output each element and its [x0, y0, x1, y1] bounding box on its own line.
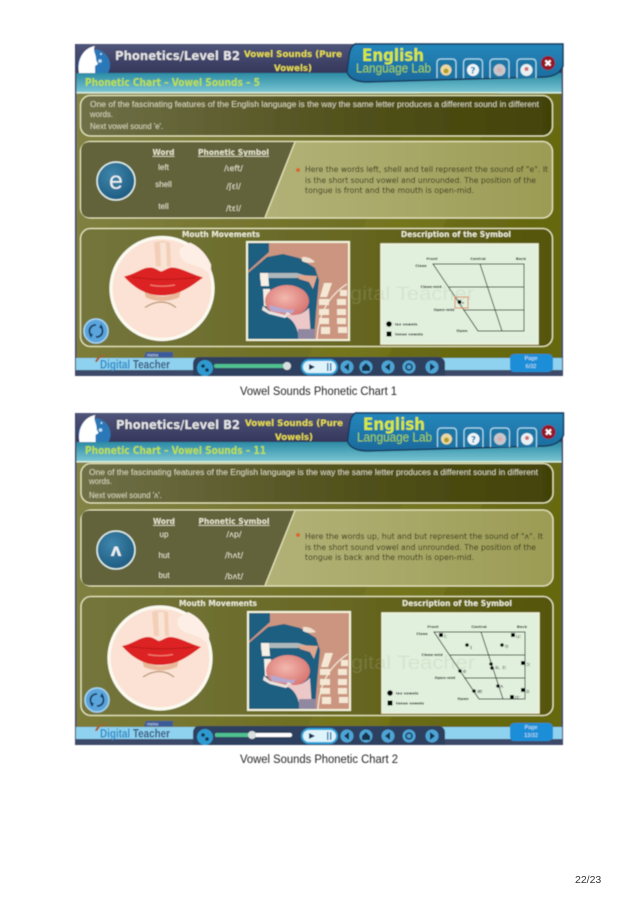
panel: introduction: One of the fascinating features of the English language is the way the same letter produces a different sound in different	[90, 100, 540, 109]
icon: vowel caret badge: ʌ	[110, 541, 122, 561]
chart: vowel trapezium: Close	[415, 263, 427, 268]
chart: vowel trapezium with all symbols: lax vowels	[396, 690, 419, 696]
page counter: 6/32	[526, 364, 536, 370]
caption 2: Vowel Sounds Phonetic Chart 2	[240, 752, 398, 766]
text: explanation: is the short sound vowel and unrounded. The position of the	[305, 542, 536, 552]
page number: 22/23	[575, 874, 601, 886]
chart: vowel trapezium with all symbols: ʊ	[505, 644, 509, 650]
panel: introduction: Next vowel sound 'e'.	[90, 122, 163, 131]
caption 1: Vowel Sounds Phonetic Chart 1	[240, 384, 397, 398]
panel: introduction: words.	[89, 110, 113, 119]
icon: replay	[84, 319, 108, 343]
footer: control bar	[75, 352, 563, 376]
logo text: English Language Lab: English	[363, 415, 425, 435]
chart: vowel trapezium: Close-mid	[420, 284, 442, 289]
chart: vowel trapezium: Open-mid	[434, 307, 455, 312]
panel: introduction: words.	[88, 477, 112, 486]
footer brand: Digital Teacher	[100, 360, 170, 372]
panel: introduction	[80, 96, 552, 136]
panel: introduction	[81, 464, 553, 503]
table: words: /ʌp/	[226, 530, 242, 539]
table: words: /ʃɛl/	[226, 182, 241, 191]
watermark: gital Teacher	[350, 284, 475, 305]
heading: topic: Vowels)	[274, 64, 312, 74]
table: words: but	[158, 571, 170, 580]
chart: vowel trapezium with all symbols: ɒ	[526, 689, 530, 695]
chart: vowel trapezium with all symbols: Close-mid	[421, 652, 443, 657]
progress slider	[215, 731, 292, 739]
icon: head logo and Language Lab toolbar	[78, 44, 563, 82]
text: explanation: Here the words up, hut and but represent the sound of "ʌ". It	[305, 531, 544, 541]
heading: topic	[244, 50, 342, 74]
page counter	[524, 725, 538, 739]
subtitle: Phonetic Chart – Vowel Sounds – 11	[85, 445, 266, 457]
table: words: shell	[155, 180, 172, 189]
table: words: /hʌt/	[225, 551, 243, 560]
icon: vowel e badge: e	[109, 167, 123, 195]
page counter	[525, 356, 537, 370]
text: explanation: tongue is front and the mouth is open-mid.	[305, 185, 474, 195]
icon: head logo and Language Lab toolbar	[78, 413, 564, 451]
heading: Phonetics level: Phonetics/Level B2	[116, 417, 240, 432]
chart: vowel trapezium with all symbols: ɔː	[526, 662, 531, 668]
chart: vowel trapezium with all symbols: Central	[471, 624, 487, 629]
table: words: left	[158, 163, 170, 172]
chart: vowel trapezium with all symbols: tense vowels	[396, 700, 425, 706]
chart: vowel trapezium: lax vowels	[395, 322, 418, 326]
subtitle: Phonetic Chart – Vowel Sounds – 5	[85, 77, 260, 89]
heading: topic: Vowels)	[275, 433, 313, 443]
page counter: 13/32	[524, 733, 538, 739]
chart: vowel trapezium with all symbols: ɑː	[515, 695, 520, 701]
panel: screen 1	[75, 44, 563, 376]
icon: vowel e badge	[97, 162, 135, 200]
table: words: tell	[158, 202, 169, 211]
chart: vowel trapezium with all symbols: Open-mid	[435, 675, 456, 680]
progress slider	[214, 362, 291, 370]
text: explanation	[305, 531, 544, 562]
panel: introduction: One of the fascinating features of the English language is the way the same letter produces a different sound in different	[89, 468, 539, 477]
page counter: Page	[525, 725, 537, 731]
chart: vowel trapezium: Back	[516, 256, 527, 261]
table: words: Phonetic Symbol	[198, 148, 269, 157]
illustration: throat cross-section	[247, 242, 349, 340]
panel: introduction: Next vowel sound 'ʌ'.	[89, 491, 162, 500]
bullet	[296, 533, 300, 537]
panel: mouth movements and description	[81, 596, 553, 716]
heading: description: Description of the Symbol	[401, 230, 511, 239]
bullet	[296, 168, 300, 172]
chart: vowel trapezium with all symbols: Open	[457, 696, 469, 701]
logo text: English Language Lab: Language Lab	[356, 62, 431, 76]
footer: control bar	[75, 721, 563, 745]
table: words: up	[160, 530, 169, 539]
chart: vowel trapezium with all symbols: Front	[427, 624, 439, 629]
text: explanation	[305, 164, 549, 195]
chart: vowel trapezium with all symbols: uː	[516, 634, 521, 640]
logo text: English Language Lab	[356, 46, 431, 76]
chart: vowel trapezium: e	[462, 300, 465, 305]
table: words: /tɛl/	[226, 204, 241, 213]
icon: replay	[85, 688, 109, 712]
illustration: lips	[109, 607, 211, 709]
heading: mouth movements: Mouth Movements	[179, 599, 257, 608]
illustration: lips	[111, 238, 213, 340]
chart: vowel trapezium: tense vowels	[395, 332, 424, 336]
chart: vowel trapezium with all symbols: Close	[416, 631, 428, 636]
chart: vowel trapezium with all symbols	[382, 613, 539, 713]
icon: vowel caret badge	[97, 531, 135, 569]
table: words	[153, 517, 270, 581]
logo text: English Language Lab	[357, 415, 432, 444]
table: words: Word	[153, 517, 175, 526]
chart: vowel trapezium with all symbols: Back	[517, 624, 528, 629]
table: words: Word	[152, 148, 174, 157]
table: words	[152, 148, 269, 213]
chart: vowel trapezium with all symbols: ə, ɜː	[495, 665, 507, 671]
text: explanation: tongue is back and the mouth is open-mid.	[305, 552, 474, 562]
heading: topic	[245, 419, 343, 443]
heading: topic: Vowel Sounds (Pure	[244, 50, 342, 60]
chart: vowel trapezium with all symbols: ʌ	[500, 684, 504, 690]
heading: topic: Vowel Sounds (Pure	[245, 419, 343, 429]
panel: word table and explanation	[81, 510, 553, 586]
heading: description: Description of the Symbol	[402, 599, 512, 608]
table: words: /ɩeft/	[224, 164, 243, 173]
logo text: English Language Lab: English	[362, 46, 424, 66]
panel: word table and explanation	[80, 142, 552, 218]
panel: mouth movements and description	[80, 228, 552, 346]
table: words: hut	[158, 551, 170, 560]
text: explanation: Here the words left, shell and tell represent the sound of "e". It	[305, 164, 549, 174]
watermark: gital Teacher	[351, 653, 476, 674]
chart: vowel trapezium: Open	[456, 328, 468, 333]
chart: vowel trapezium: Front	[426, 256, 438, 261]
text: explanation: is the short sound vowel and unrounded. The position of the	[305, 175, 536, 185]
table: words: Phonetic Symbol	[198, 517, 270, 526]
table: words: /bʌt/	[225, 572, 243, 581]
chart: vowel trapezium with all symbols: e	[463, 669, 467, 675]
panel: screen 2	[75, 413, 564, 745]
chart: vowel trapezium with all symbols: iː	[444, 634, 448, 640]
logo text: English Language Lab: Language Lab	[357, 430, 432, 444]
heading: Phonetics level: Phonetics/Level B2	[115, 48, 240, 63]
menu tab label: menu	[147, 722, 159, 726]
illustration: throat cross-section	[248, 612, 350, 710]
menu tab label: menu	[147, 352, 159, 358]
page counter: Page	[525, 356, 537, 362]
chart: vowel trapezium: Central	[470, 256, 486, 261]
chart: vowel trapezium with all symbols: ɪ	[470, 645, 472, 651]
chart: vowel trapezium with all symbols: æ	[477, 689, 483, 695]
footer brand: Digital Teacher	[100, 728, 170, 740]
chart: vowel trapezium	[381, 244, 538, 344]
heading: mouth movements: Mouth Movements	[182, 230, 260, 239]
